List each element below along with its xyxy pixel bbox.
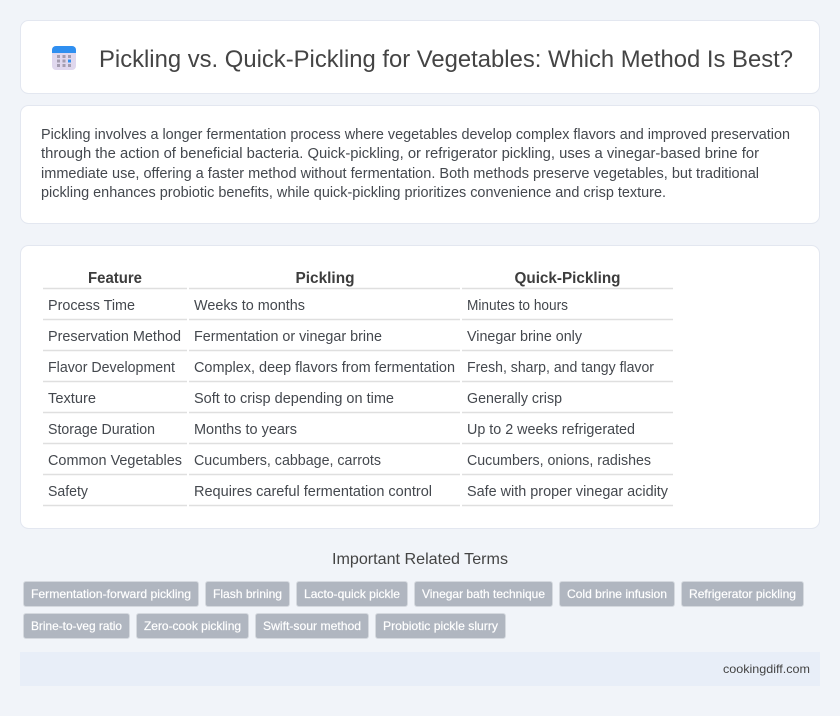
intro text: immediate use, offering a faster method without fermentation. Both methods preserve vegetables, but traditional xyxy=(41,166,759,182)
title: Pickling vs. Quick-Pickling for Vegetables: Which Method Is Best? xyxy=(99,46,793,73)
row: process time: Minutes to hours xyxy=(467,298,568,314)
source credit: cookingdiff.com xyxy=(723,662,810,676)
panel: header xyxy=(20,20,820,94)
row: safety: Safe with proper vinegar acidity xyxy=(467,484,669,500)
row: process time: Weeks to months xyxy=(194,298,305,314)
chip xyxy=(296,582,408,606)
intro text xyxy=(41,127,790,201)
chip: Refrigerator pickling xyxy=(689,587,796,601)
row: texture: Soft to crisp depending on time xyxy=(194,391,394,407)
row: common vegetables xyxy=(48,453,651,469)
table header: Pickling xyxy=(296,270,354,287)
row: preservation method: Preservation Method xyxy=(48,329,181,345)
row: common vegetables: Cucumbers, onions, radishes xyxy=(467,453,651,469)
intro text: Pickling involves a longer fermentation process where vegetables develop complex flavors and improved preservation xyxy=(41,127,790,143)
chip xyxy=(414,582,552,606)
chip: Probiotic pickle slurry xyxy=(383,619,498,633)
chip xyxy=(256,614,368,638)
chip xyxy=(376,614,506,638)
row: safety xyxy=(48,484,669,500)
row: safety: Safety xyxy=(48,484,89,500)
row: texture: Generally crisp xyxy=(467,391,562,407)
chip: Brine-to-veg ratio xyxy=(31,619,122,633)
chip: Vinegar bath technique xyxy=(422,587,545,601)
footer xyxy=(20,652,820,686)
table header xyxy=(88,270,620,287)
table header: Feature xyxy=(88,270,142,287)
row: flavor development: Fresh, sharp, and tangy flavor xyxy=(467,360,654,376)
chip xyxy=(682,582,804,606)
chip xyxy=(206,582,290,606)
intro text: through the action of beneficial bacteria. Quick-pickling, or refrigerator pickling, uses a vinegar-based brine for xyxy=(41,146,759,162)
row: safety: Requires careful fermentation control xyxy=(194,484,432,500)
chip: Flash brining xyxy=(213,587,282,601)
icon: calendar xyxy=(52,46,76,70)
row: storage duration xyxy=(48,422,635,438)
row: flavor development: Complex, deep flavors from fermentation xyxy=(194,360,455,376)
chip: Fermentation-forward pickling xyxy=(31,587,191,601)
row: texture: Texture xyxy=(48,391,96,407)
row: process time xyxy=(48,298,568,314)
heading: related terms: Important Related Terms xyxy=(332,551,508,568)
chip: Cold brine infusion xyxy=(567,587,667,601)
row: process time: Process Time xyxy=(48,298,135,314)
chip xyxy=(560,582,674,606)
chip xyxy=(24,582,198,606)
row: flavor development: Flavor Development xyxy=(48,360,175,376)
row: preservation method: Fermentation or vinegar brine xyxy=(194,329,382,345)
row: preservation method: Vinegar brine only xyxy=(467,329,583,345)
row: storage duration: Up to 2 weeks refrigerated xyxy=(467,422,635,438)
table header: Quick-Pickling xyxy=(514,270,620,287)
related term chips xyxy=(24,582,804,638)
row: storage duration: Months to years xyxy=(194,422,297,438)
row: common vegetables: Common Vegetables xyxy=(48,453,182,469)
row: flavor development xyxy=(48,360,654,376)
row: common vegetables: Cucumbers, cabbage, carrots xyxy=(194,453,381,469)
row: preservation method xyxy=(48,329,583,345)
chip: Swift-sour method xyxy=(263,619,361,633)
chip: Lacto-quick pickle xyxy=(304,587,400,601)
intro text: pickling enhances probiotic benefits, while quick-pickling prioritizes convenience and crisp texture. xyxy=(41,185,666,201)
chip xyxy=(136,614,248,638)
panel: intro xyxy=(20,106,820,224)
chip xyxy=(24,614,130,638)
row: texture xyxy=(48,391,562,407)
row: storage duration: Storage Duration xyxy=(48,422,155,438)
panel: comparison table xyxy=(20,246,820,528)
chip: Zero-cook pickling xyxy=(144,619,241,633)
